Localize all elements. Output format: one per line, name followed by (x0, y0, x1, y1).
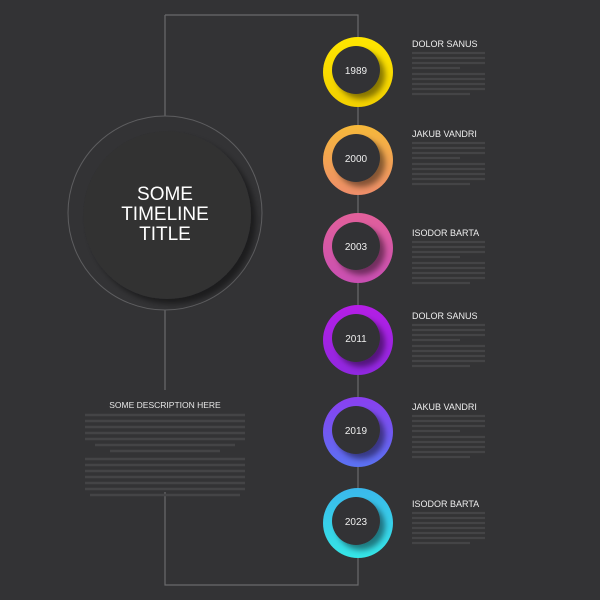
milestone texts: ISODOR BARTA (412, 228, 479, 238)
milestone 2003: 2003 (345, 242, 368, 253)
title: SOME (137, 184, 193, 205)
milestone 2011: 2011 (345, 334, 367, 345)
title: TIMELINE (121, 204, 209, 225)
milestone 2023: 2023 (345, 517, 368, 528)
title (121, 184, 209, 245)
milestone 2019 (323, 397, 393, 467)
description block: SOME DESCRIPTION HERE (109, 400, 221, 410)
milestone texts: JAKUB VANDRI (412, 402, 477, 412)
milestone 2000 (323, 125, 393, 195)
milestone 2023 (323, 488, 393, 558)
milestone body text (412, 53, 485, 543)
milestone texts: JAKUB VANDRI (412, 129, 477, 139)
milestones (323, 37, 393, 558)
frame lines (165, 15, 358, 585)
milestone 1989 (323, 37, 393, 107)
milestone 2019: 2019 (345, 426, 368, 437)
milestone texts: DOLOR SANUS (412, 311, 478, 321)
milestone texts (412, 39, 479, 509)
milestone texts: DOLOR SANUS (412, 39, 478, 49)
milestone 1989: 1989 (345, 66, 368, 77)
milestone 2000: 2000 (345, 154, 368, 165)
milestone 2011 (323, 305, 393, 375)
title circle (68, 116, 262, 310)
title: TITLE (139, 224, 191, 245)
milestone texts: ISODOR BARTA (412, 499, 479, 509)
milestone 2003 (323, 213, 393, 283)
description block (85, 400, 245, 495)
